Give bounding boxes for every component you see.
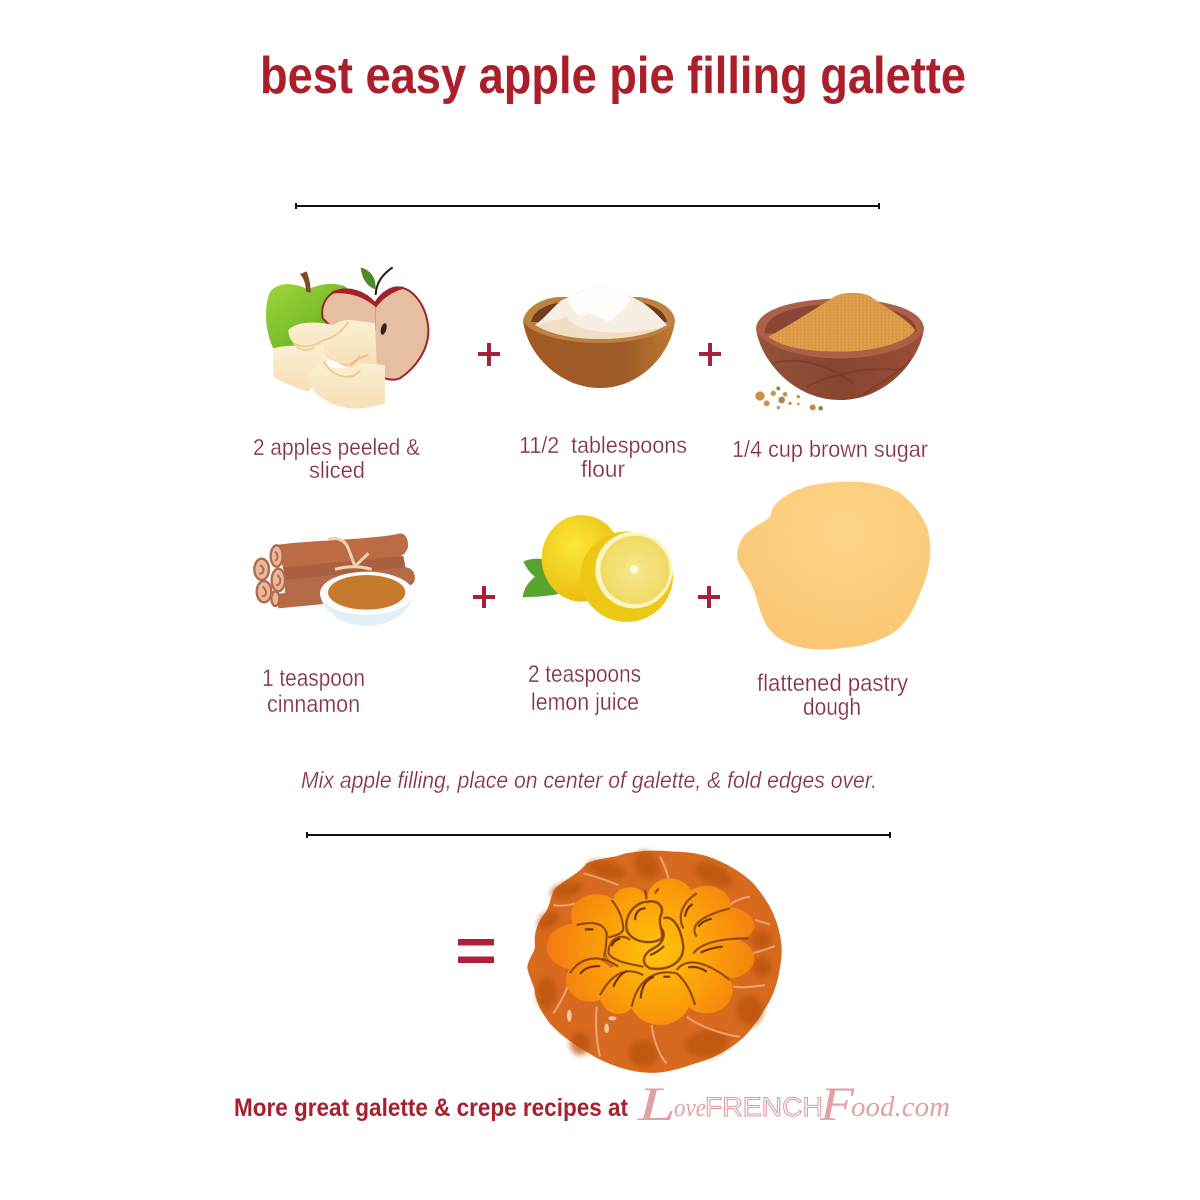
icon: brown sugar bowl <box>755 293 924 411</box>
logo: LoveFRENCHFood.com: ood.com <box>851 1092 950 1123</box>
label: lemon juice <box>528 661 641 716</box>
plus sign <box>473 586 495 608</box>
label: apples <box>253 434 420 483</box>
icon: lemons <box>523 515 673 622</box>
label: cinnamon: cinnamon <box>267 691 360 718</box>
logo: LoveFRENCHFood.com: L <box>637 1078 676 1131</box>
label: flour: 11/2 tablespoons <box>519 432 687 458</box>
plus sign <box>699 343 721 366</box>
icon: pastry dough <box>737 482 930 650</box>
icon: cinnamon <box>254 533 415 626</box>
equals sign <box>458 939 494 963</box>
label: lemon juice: lemon juice <box>531 689 639 716</box>
logo: LoveFRENCHFood.com: F <box>819 1078 855 1131</box>
label: apples: 2 apples peeled & <box>253 434 420 460</box>
label: cinnamon: 1 teaspoon <box>262 665 365 692</box>
label: lemon juice: 2 teaspoons <box>528 661 641 688</box>
plus sign <box>478 343 500 366</box>
label: pastry dough <box>757 670 908 721</box>
icon: finished galette <box>527 846 782 1073</box>
logo: LoveFRENCHFood.com: ove <box>674 1093 706 1122</box>
bottom divider <box>307 832 890 838</box>
label: brown sugar: 1/4 cup brown sugar <box>732 436 928 462</box>
label: pastry dough: dough <box>803 694 861 721</box>
logo: LoveFRENCHFood.com <box>637 1078 950 1131</box>
logo: LoveFRENCHFood.com: FRENCH <box>705 1092 823 1122</box>
icon: flour bowl <box>523 283 675 388</box>
top divider <box>296 203 879 209</box>
footer text: More great galette & crepe recipes at <box>234 1094 629 1122</box>
label: pastry dough: flattened pastry <box>757 670 908 697</box>
label: flour: flour <box>581 456 625 482</box>
label: flour <box>519 432 687 482</box>
title: best easy apple pie filling galette <box>260 47 966 105</box>
plus sign <box>698 586 720 608</box>
instruction text: Mix apple filling, place on center of galette, & fold edges over. <box>301 767 877 793</box>
icon: apples <box>266 267 428 409</box>
label: apples: sliced <box>309 457 365 483</box>
label: cinnamon <box>262 665 365 718</box>
